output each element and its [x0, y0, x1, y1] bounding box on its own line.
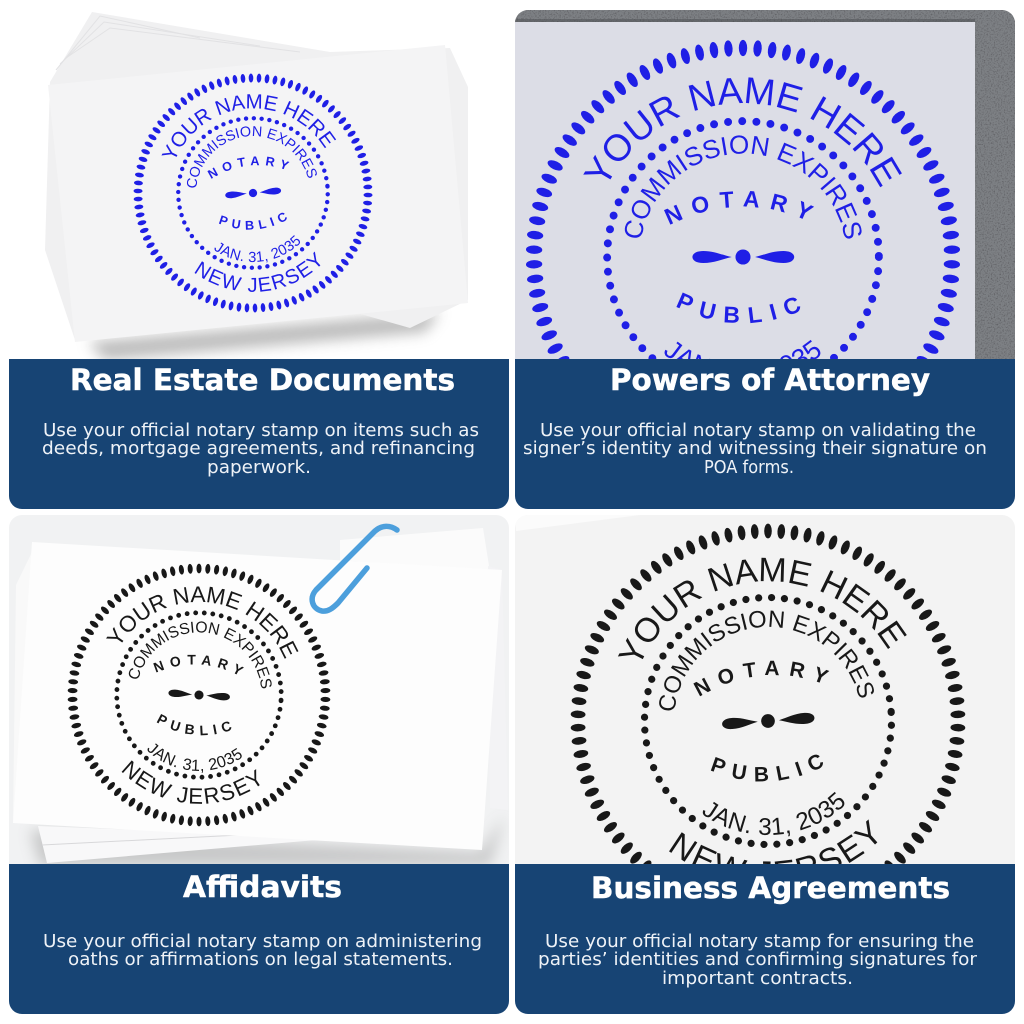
caption: real estate documents: paperwork.: [207, 458, 311, 478]
caption: real estate documents: deeds, mortgage agreements, and refinancing: [42, 439, 475, 459]
stamp: large blue notary seal, cropped: PUBLIC: [676, 292, 800, 324]
stamp: blue round notary seal: YOUR NAME HERE: [162, 94, 336, 157]
caption: business agreements: parties’ identities and confirming signatures for: [538, 950, 978, 970]
caption: affidavits: Use your official notary stamp on administering: [43, 932, 482, 952]
caption: real estate documents: [9, 359, 509, 509]
stamp: large black notary seal, cropped: PUBLIC: [710, 754, 823, 782]
photo: stack of white cards: [45, 12, 468, 359]
stamp: large black notary seal, cropped: NEW JERSEY: [669, 819, 878, 864]
icon: blue paperclip: [312, 526, 397, 611]
stamp: large blue notary seal, cropped: YOUR NAME HERE: [583, 77, 902, 188]
caption: affidavits: [9, 864, 509, 1014]
stamp: large black notary seal, cropped: JAN. 31, 2035: [702, 792, 844, 836]
panel: business agreements: [515, 515, 1015, 1014]
stamp: large blue notary seal, cropped: [526, 40, 960, 359]
photo: white sheets with paperclip: [9, 515, 509, 866]
stamp: black round notary seal: JAN. 31, 2035: [148, 743, 242, 773]
stamp: blue round notary seal: NOTARY: [207, 156, 290, 179]
stamp: black round notary seal: NEW JERSEY: [122, 760, 260, 804]
caption: affidavits: Affidavits: [183, 870, 342, 904]
stamp: large blue notary seal, cropped: NOTARY: [664, 191, 814, 225]
caption: real estate documents: Use your official notary stamp on items such as: [43, 421, 479, 441]
caption: powers of attorney: Use your official notary stamp on validating the: [540, 421, 976, 441]
stamp: black round notary seal: COMMISSION EXPIRES: [128, 621, 272, 688]
stamp: blue round notary seal: [134, 74, 373, 312]
caption: business agreements: Business Agreements: [591, 871, 950, 905]
caption: powers of attorney: signer’s identity and witnessing their signature on: [523, 439, 987, 459]
caption: real estate documents: Real Estate Documents: [70, 363, 455, 397]
panel: real estate documents: [9, 12, 509, 509]
stamp: large black notary seal, cropped: [570, 524, 966, 864]
panel: affidavits: [9, 515, 509, 1014]
caption: business agreements: important contracts.: [662, 969, 853, 989]
stamp: large blue notary seal, cropped: COMMISSION EXPIRES: [624, 135, 862, 239]
stamp: black round notary seal: NOTARY: [153, 654, 244, 674]
stamp: blue round notary seal: JAN. 31, 2035: [214, 235, 300, 263]
photo: paper on grey concrete: [515, 10, 1015, 360]
caption: affidavits: oaths or affirmations on legal statements.: [68, 950, 453, 970]
stamp: black round notary seal: [68, 564, 330, 826]
stamp: large black notary seal, cropped: YOUR NAME HERE: [618, 558, 907, 660]
photo: close-up white paper: [515, 515, 1015, 865]
caption: business agreements: Use your official notary stamp for ensuring the: [545, 932, 974, 952]
stamp: black round notary seal: YOUR NAME HERE: [106, 586, 298, 659]
caption: powers of attorney: POA forms.: [704, 458, 794, 478]
stamp: large black notary seal, cropped: COMMISSION EXPIRES: [659, 610, 874, 710]
stamp: large black notary seal, cropped: NOTARY: [693, 660, 830, 696]
stamp: blue round notary seal: NEW JERSEY: [194, 252, 320, 292]
stamp: blue round notary seal: COMMISSION EXPIRES: [187, 126, 317, 188]
caption: powers of attorney: Powers of Attorney: [610, 363, 930, 397]
stamp: black round notary seal: PUBLIC: [156, 714, 232, 736]
caption: business agreements: [515, 864, 1015, 1014]
stamp: blue round notary seal: PUBLIC: [219, 212, 287, 230]
caption: powers of attorney: [515, 359, 1015, 509]
stamp: large blue notary seal, cropped: JAN. 31, 2035: [664, 340, 820, 359]
panel: powers of attorney: [515, 10, 1015, 509]
